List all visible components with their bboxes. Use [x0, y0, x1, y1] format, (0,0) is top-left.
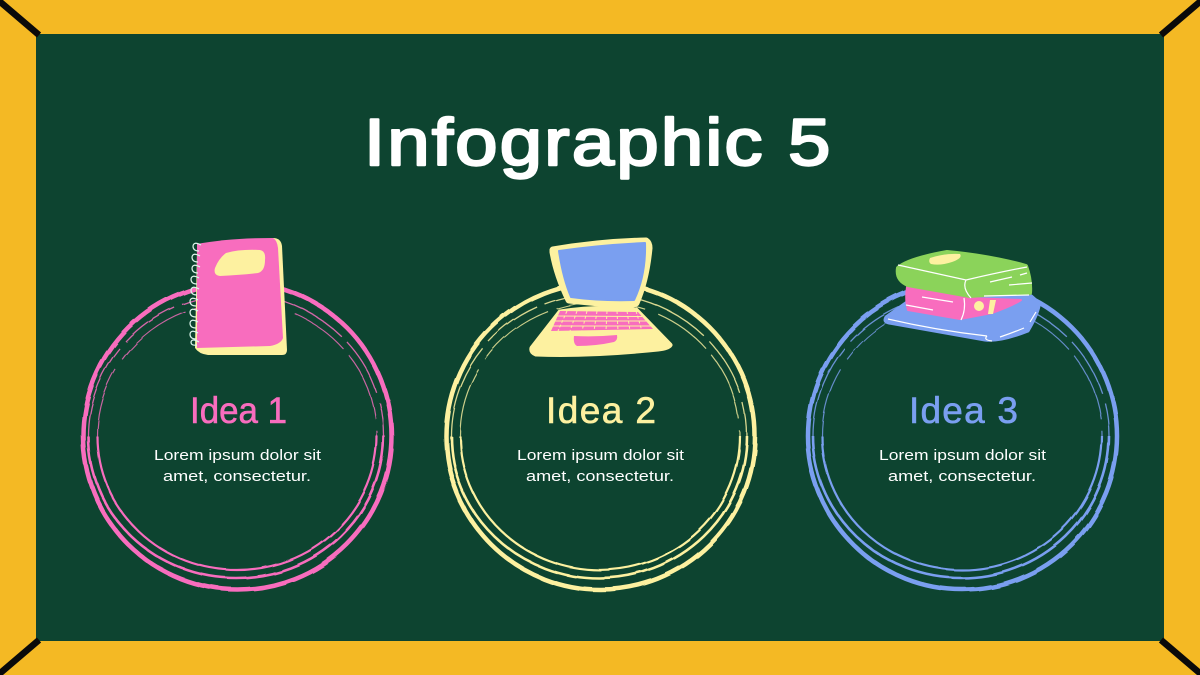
heading: idea 2: Idea 2 — [546, 390, 656, 431]
icon: notebook — [190, 238, 287, 355]
text: idea 3 body — [879, 447, 1047, 485]
heading: idea 1: Idea 1 — [190, 390, 287, 431]
sketched ring: yellow — [446, 282, 755, 590]
text: idea 3 body: amet, consectetur. — [888, 468, 1036, 485]
text: idea 2 body: Lorem ipsum dolor sit — [517, 447, 685, 464]
text: idea 3 body: Lorem ipsum dolor sit — [879, 447, 1047, 464]
text: idea 1 body: amet, consectetur. — [163, 468, 311, 485]
icon: laptop — [532, 241, 670, 354]
sketched ring: blue — [808, 282, 1117, 590]
laptop keys — [551, 311, 651, 331]
text: idea 1 body — [154, 447, 322, 485]
text: idea 2 body — [517, 447, 685, 485]
heading: idea 3: Idea 3 — [909, 390, 1018, 431]
bottom blue book — [885, 290, 1039, 340]
middle pink book — [906, 287, 1021, 319]
notebook spiral — [190, 243, 201, 345]
panel: idea 2 — [446, 241, 755, 590]
sketched ring: pink — [83, 282, 392, 590]
icon: stack of books — [885, 252, 1039, 341]
title: Infographic 5 — [364, 107, 833, 180]
text: idea 1 body: Lorem ipsum dolor sit — [154, 447, 322, 464]
text: idea 2 body: amet, consectetur. — [526, 468, 674, 485]
top green book — [898, 252, 1030, 296]
panel: idea 1 — [83, 238, 392, 590]
panel: idea 3 — [808, 252, 1117, 590]
